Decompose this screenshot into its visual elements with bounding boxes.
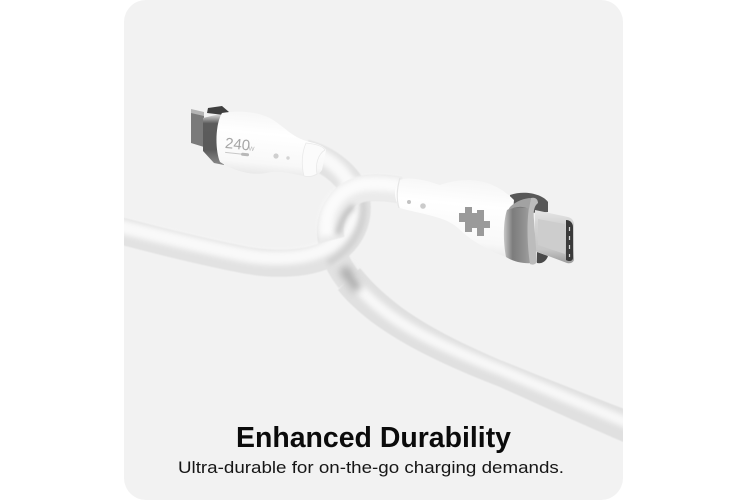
brand logo: double plus — [459, 207, 490, 236]
infographic — [124, 0, 623, 500]
connector: left USB-C plug — [191, 106, 326, 177]
indicator dots — [273, 153, 290, 160]
moulded body — [216, 112, 326, 176]
metal ring front — [504, 207, 533, 263]
metal ring — [203, 113, 224, 165]
cable: upper arc crossing over the loop — [326, 183, 400, 240]
cable: long strand to lower right — [318, 238, 623, 442]
USB-C plug shell — [535, 210, 574, 263]
subheading: Ultra-durable for on-the-go charging demands. — [178, 458, 564, 477]
capacity mark: 240W: 240 — [224, 135, 251, 154]
cable: left strand and loop — [110, 150, 363, 263]
indicator dots — [407, 200, 426, 209]
moulded body — [395, 178, 514, 258]
panel: background card — [124, 0, 623, 500]
strain relief collar — [397, 178, 400, 208]
metal ring back — [510, 193, 548, 214]
plug tip — [191, 110, 204, 147]
heading: Enhanced Durability — [236, 422, 511, 454]
capacity mark: 240W: W — [248, 146, 255, 153]
cable artwork — [110, 150, 650, 449]
strain relief collar — [302, 143, 325, 177]
metal flange — [528, 198, 538, 265]
connector: right USB-C plug — [395, 178, 574, 265]
